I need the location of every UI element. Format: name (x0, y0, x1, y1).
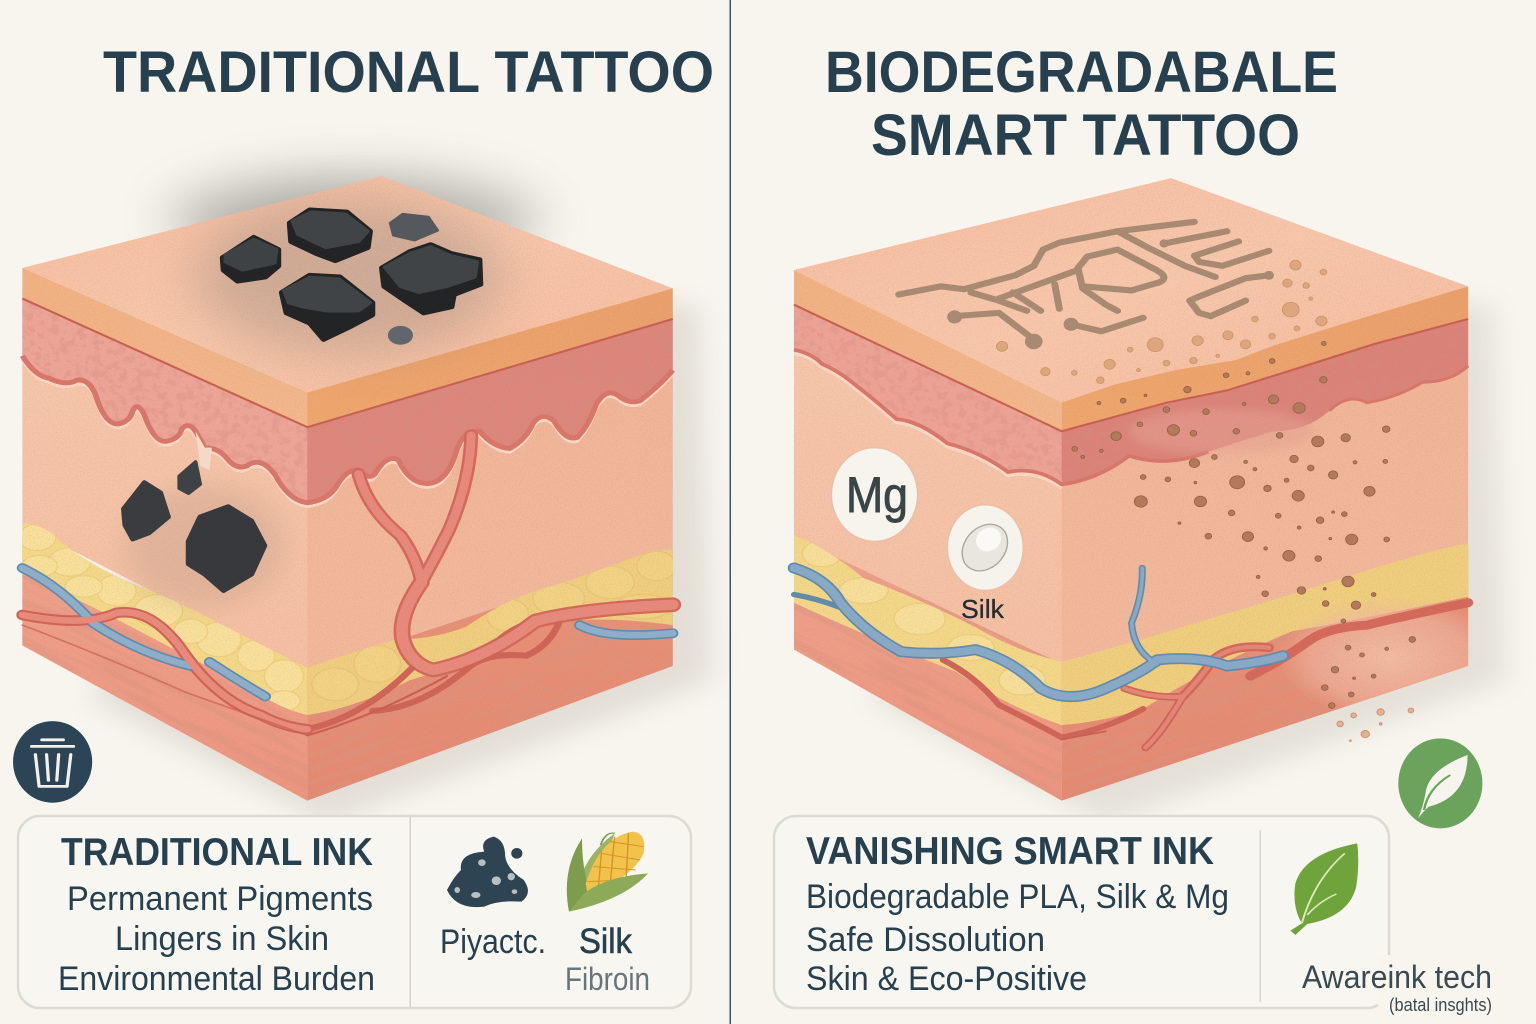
text block: Lingers in Skin (115, 920, 329, 958)
Piyactc label: Piyactc. (440, 923, 546, 961)
epidermis (20, 298, 675, 508)
cube shadow (873, 292, 1506, 823)
top face (794, 178, 1468, 403)
epidermis (794, 304, 1470, 489)
hypodermis (794, 546, 1468, 801)
Silk label: Silk (961, 594, 1005, 624)
skin cube: biodegradable smart tattoo (788, 178, 1510, 814)
title: traditional tattoo: TRADITIONAL TATTOO (103, 40, 714, 105)
particles leaving the skin (1337, 708, 1414, 741)
skin cube: traditional tattoo (16, 148, 717, 814)
text block (806, 878, 1229, 998)
Awareink tech credit: (batal insghts) (1389, 995, 1492, 1015)
hypodermis (22, 538, 673, 801)
grain texture (794, 179, 1468, 797)
cube shadow and haze (93, 170, 712, 823)
panel: traditional ink (18, 816, 691, 1008)
printed circuit on top face (899, 222, 1274, 349)
icon: trash can (13, 721, 92, 803)
Fibroin label: Fibroin (565, 961, 650, 997)
title: biodegradable smart tattoo: SMART TATTOO (871, 103, 1300, 168)
silk badge (947, 505, 1024, 590)
text block: Permanent Pigments (67, 880, 373, 918)
icon: ink blob (447, 837, 528, 907)
text block: Skin & Eco-Positive (806, 960, 1087, 998)
panel divider (1260, 830, 1261, 1002)
stratum layer (22, 268, 673, 427)
heading: VANISHING SMART INK (806, 830, 1214, 873)
dermis (794, 305, 1468, 664)
panel box (18, 816, 691, 1008)
vessels (794, 568, 1468, 748)
icon: corn (567, 832, 648, 912)
Mg badge circle (831, 448, 918, 541)
dissolving particles in skin (1072, 341, 1416, 708)
fat layer (19, 523, 676, 715)
Mg label: Mg (846, 467, 908, 523)
dissolved patch (1129, 409, 1502, 719)
panel divider (410, 817, 411, 1007)
panel box (774, 816, 1389, 1008)
title: biodegradable smart tattoo: BIODEGRADABALE (825, 40, 1338, 105)
text block: Biodegradable PLA, Silk & Mg (806, 878, 1229, 916)
Awareink tech credit (1302, 955, 1492, 1015)
icon: leaf (1290, 843, 1358, 935)
text block (58, 880, 375, 998)
panel: vanishing smart ink (774, 816, 1492, 1015)
center divider (730, 0, 731, 1024)
stratum layer (794, 270, 1468, 431)
heading: TRADITIONAL INK (61, 831, 373, 874)
top surface ink stones (196, 199, 503, 354)
text block: Safe Dissolution (806, 921, 1045, 959)
Awareink tech credit: Awareink tech (1302, 959, 1492, 995)
top face (22, 176, 673, 392)
blood vessel tree (22, 435, 673, 735)
fat layer (794, 535, 1468, 725)
title: biodegradable smart tattoo (825, 40, 1338, 168)
ink fragments in dermis (123, 431, 284, 607)
icon: green leaf badge (1398, 738, 1482, 828)
text block: Environmental Burden (58, 960, 375, 998)
dissolving particles on top (997, 260, 1327, 383)
dermis (22, 299, 673, 670)
Silk label: Silk (579, 922, 632, 961)
grain texture (22, 177, 672, 798)
